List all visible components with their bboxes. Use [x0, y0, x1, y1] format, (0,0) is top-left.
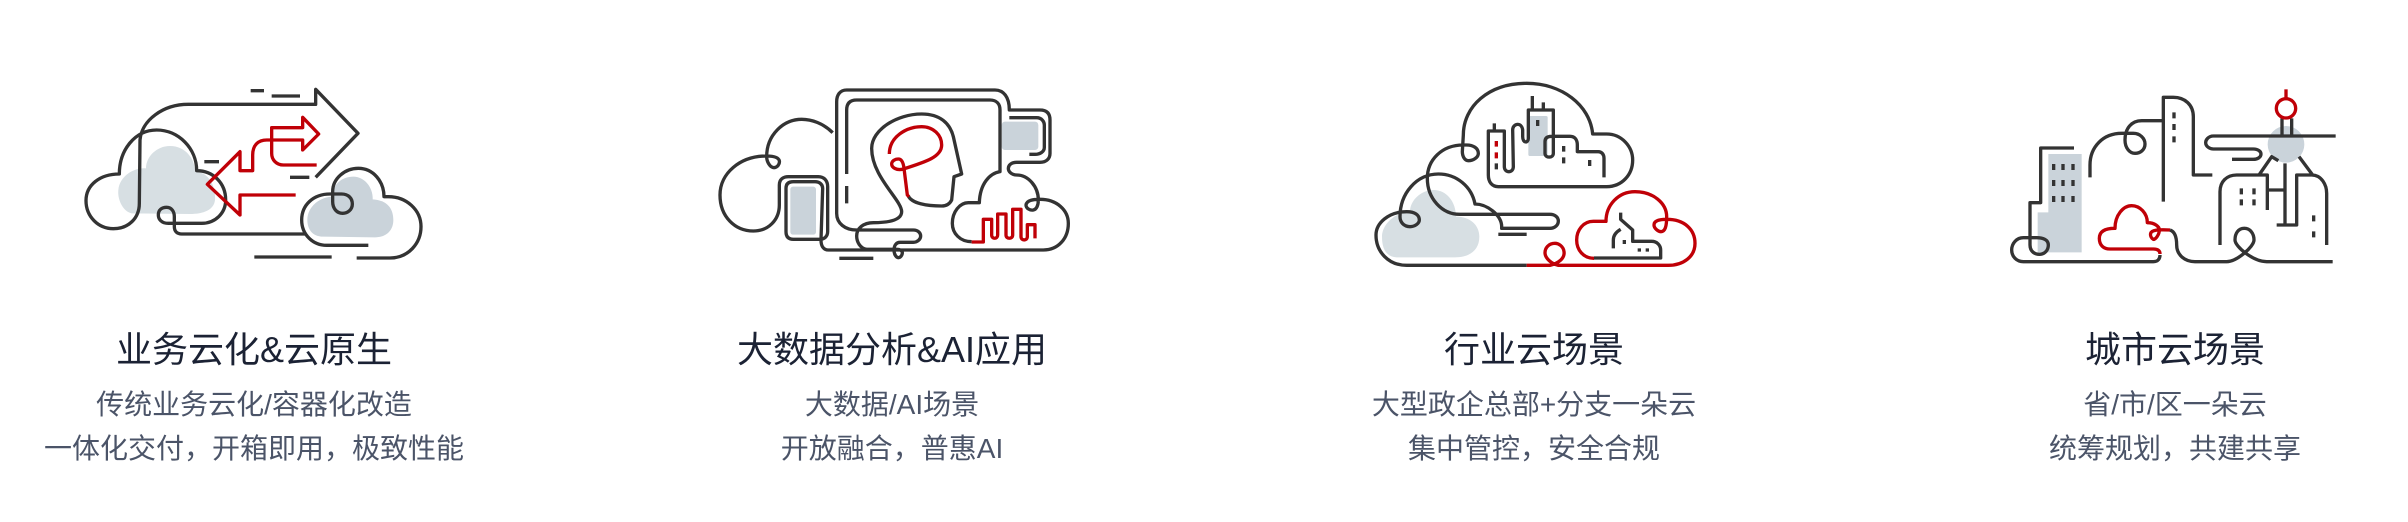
icon: monitor with head, devices and cloud	[718, 88, 1070, 260]
description: 大数据/AI场景	[805, 389, 979, 420]
description: 省/市/区一朵云	[2083, 389, 2267, 420]
icon: clouds with industrial skyline	[1374, 82, 1697, 267]
red windows	[1491, 141, 1501, 158]
ground line with loop	[2170, 228, 2333, 262]
red arrows	[207, 117, 319, 215]
icon: city skyline with tower and cloud	[2010, 89, 2336, 264]
description	[2049, 389, 2301, 464]
left building line	[2012, 148, 2160, 262]
cloud fill	[1382, 190, 1479, 257]
factory in red cloud	[1594, 213, 1661, 258]
building fill	[1528, 116, 1548, 156]
description	[44, 389, 464, 464]
description: 统筹规划，共建共享	[2049, 433, 2301, 464]
red cloud	[1527, 192, 1695, 265]
horizon line	[2206, 136, 2336, 159]
heading: 城市云场景	[2085, 329, 2265, 370]
red cloud	[2099, 206, 2170, 254]
main cloud and skyline line	[1376, 83, 1633, 265]
description	[1372, 389, 1696, 464]
description: 传统业务云化/容器化改造	[96, 389, 412, 420]
panel: industry cloud	[1372, 82, 1697, 464]
panel: big data and AI	[718, 88, 1070, 464]
heading: 行业云场景	[1444, 329, 1624, 370]
main line: clouds, monitor and head profile	[720, 90, 1068, 258]
antennas and dash	[1494, 96, 1543, 234]
red brain line	[889, 127, 942, 197]
motion dashes	[204, 91, 332, 257]
description: 大型政企总部+分支一朵云	[1372, 389, 1696, 420]
description	[781, 389, 1003, 464]
description: 开放融合，普惠AI	[781, 433, 1003, 464]
tv tower and right buildings	[2220, 118, 2327, 245]
panel: business cloudification and cloud native	[44, 88, 464, 464]
device screen fills	[790, 122, 1038, 235]
red tower ball	[2276, 89, 2296, 118]
icon: two clouds with arrows	[84, 88, 423, 260]
heading: 大数据分析&AI应用	[737, 329, 1047, 370]
heading: 业务云化&云原生	[116, 329, 392, 370]
building windows	[2054, 112, 2314, 237]
grey fills	[2038, 126, 2304, 252]
panel: city cloud	[2010, 89, 2336, 464]
red waveform	[972, 209, 1035, 242]
cloud fill right	[307, 177, 393, 237]
right cloud line	[302, 168, 421, 258]
big arrow and left cloud line	[86, 89, 358, 234]
description: 一体化交付，开箱即用，极致性能	[44, 433, 464, 464]
cloud fill left	[118, 146, 215, 214]
monitor inner line and small cloud	[839, 100, 1044, 258]
centre tower line	[2090, 97, 2212, 202]
description: 集中管控，安全合规	[1408, 433, 1660, 464]
dark windows	[1496, 120, 1590, 169]
